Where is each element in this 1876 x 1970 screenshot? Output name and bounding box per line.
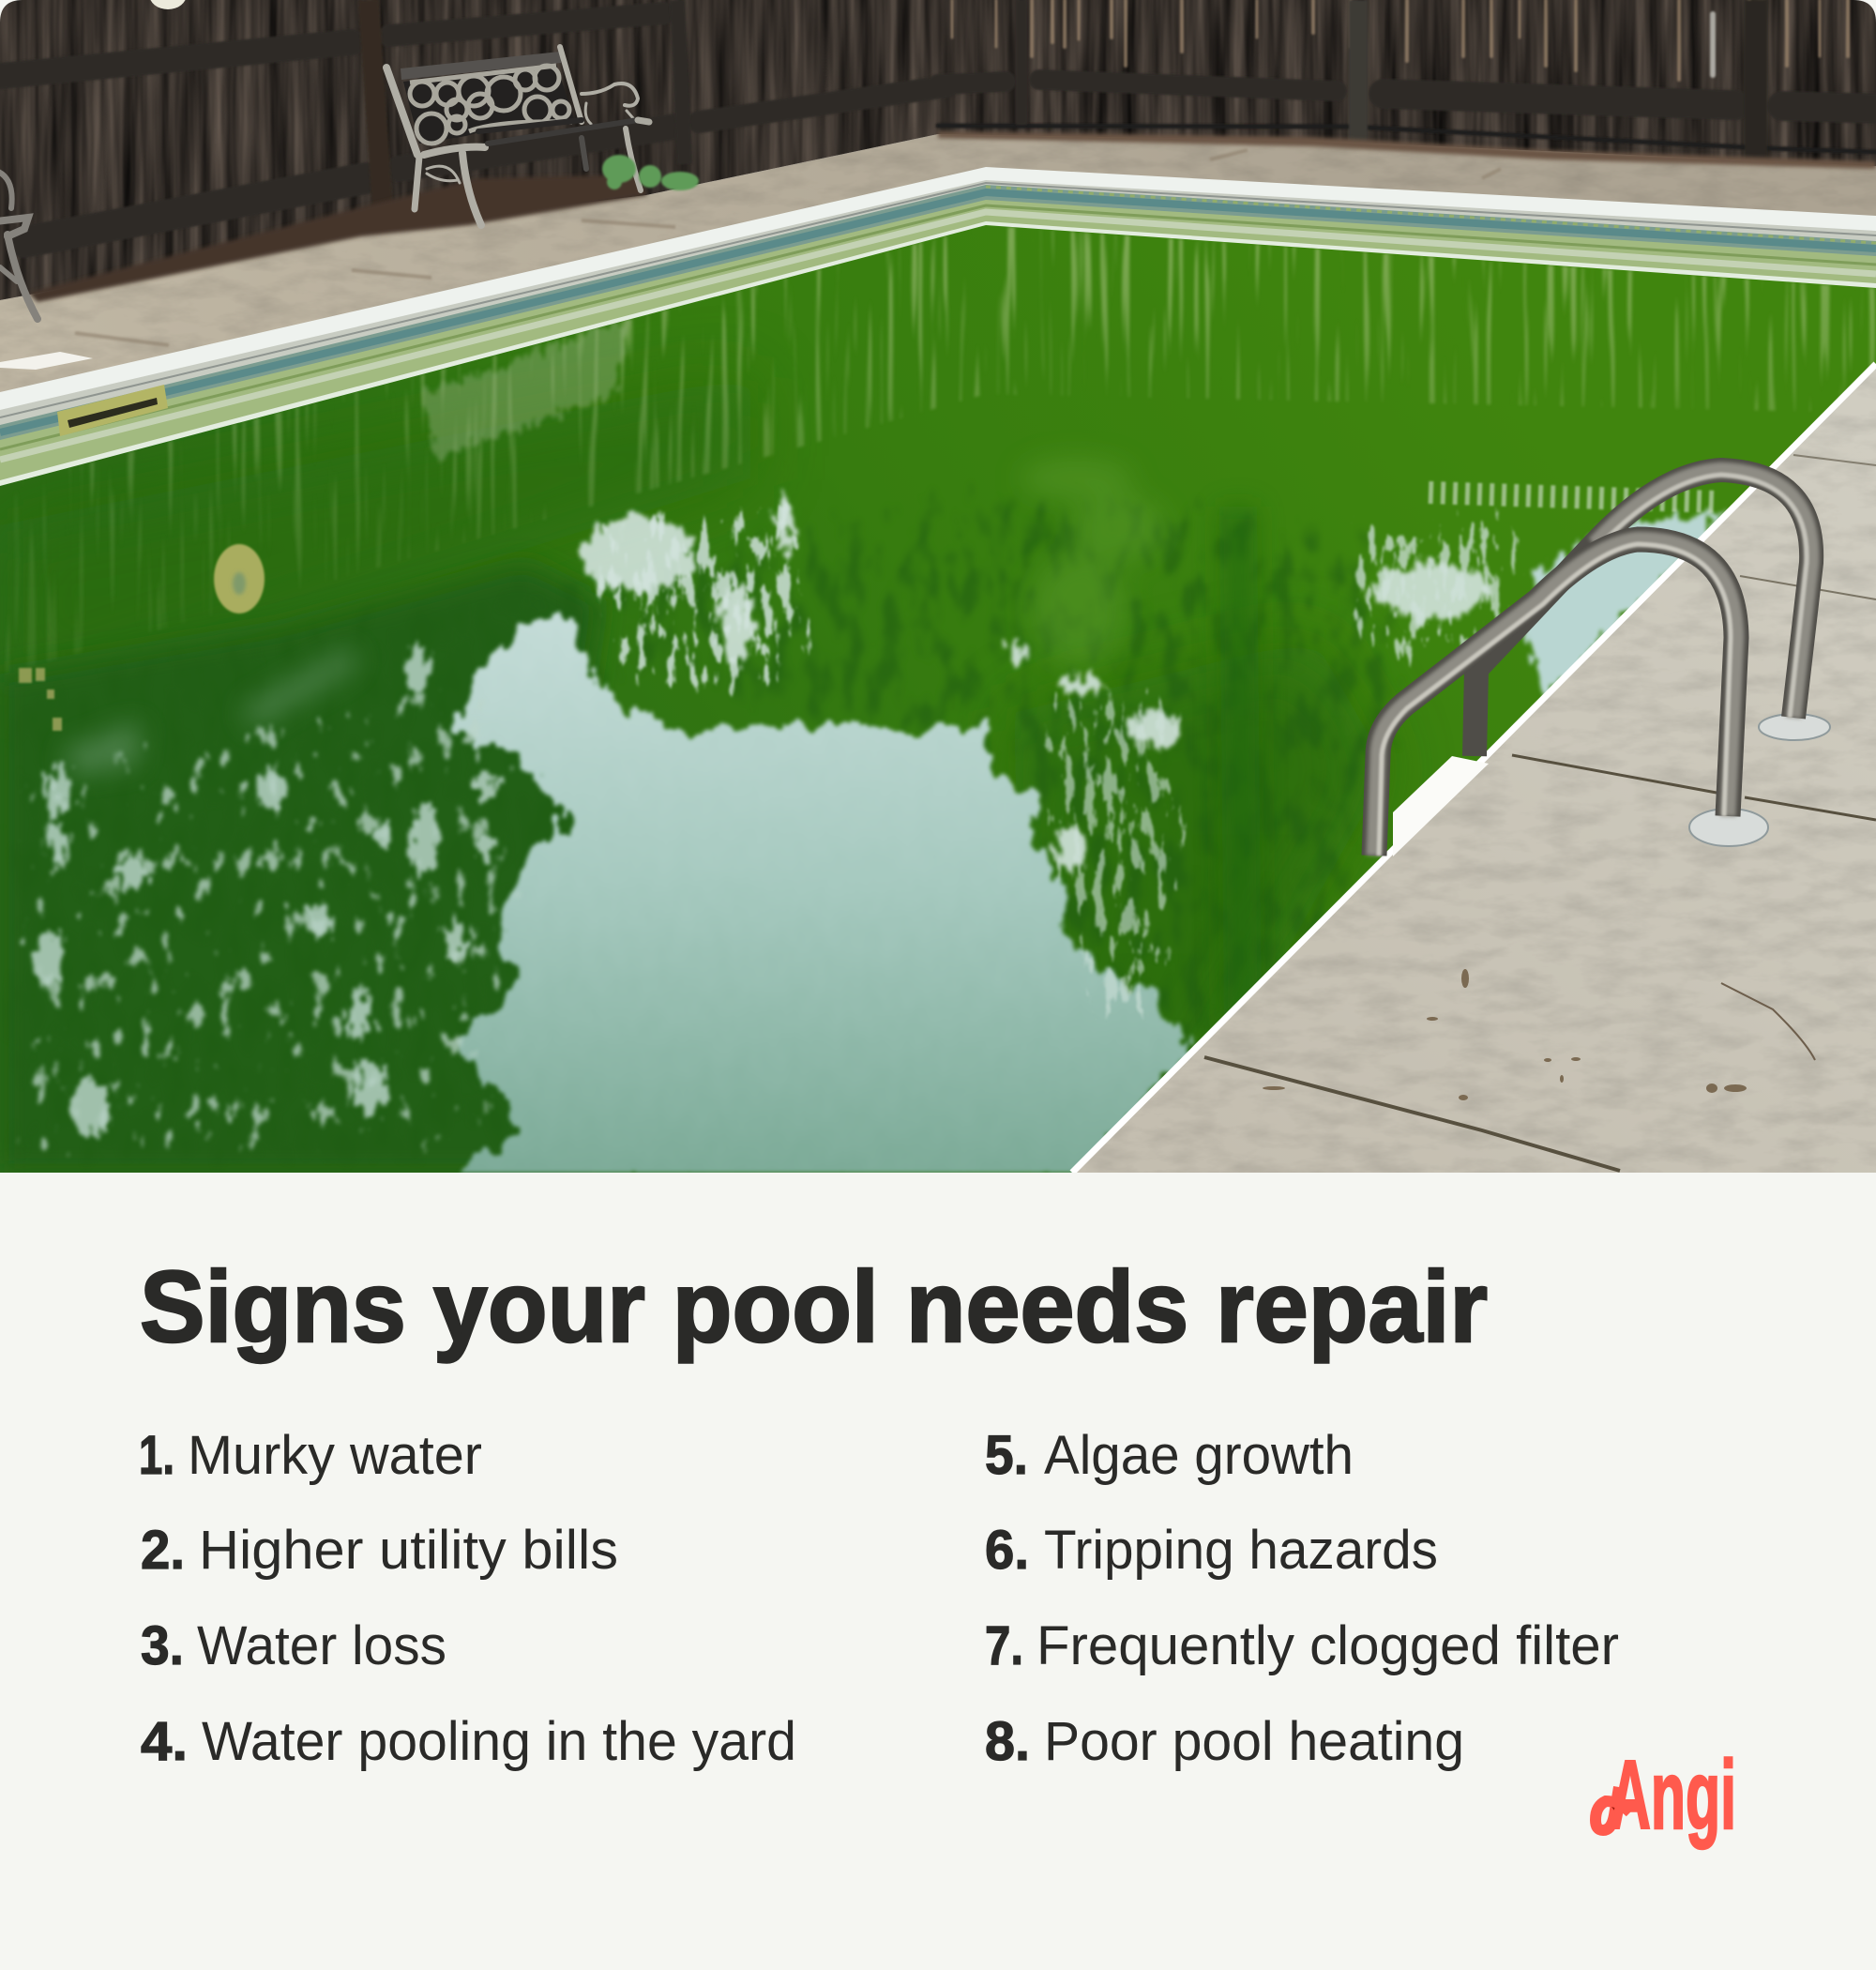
skimmer [57, 385, 168, 436]
bench [386, 47, 649, 225]
item 8: 8. [985, 1711, 1030, 1772]
highlights in left tree [33, 644, 495, 1132]
sky reflection (teal) [455, 610, 1195, 1182]
paper on deck [0, 352, 93, 370]
bright centre patches [582, 492, 1487, 870]
second bench at left edge [0, 171, 38, 319]
small tile glints at left [19, 668, 62, 731]
light green patches [1021, 458, 1166, 666]
front rail [1374, 539, 1768, 856]
item 7: 7. [985, 1615, 1023, 1676]
item 5: 5. [985, 1425, 1028, 1486]
bright pale area near ladder [1524, 511, 1726, 699]
water base [0, 188, 1876, 1220]
title: Signs your pool needs repair [140, 1250, 1488, 1363]
deck debris [1263, 969, 1815, 1100]
item 7: Frequently clogged filter [1036, 1615, 1619, 1676]
item 1: 1. [139, 1425, 174, 1486]
logo: Angi [1596, 1741, 1736, 1850]
item 6: Tripping hazards [1044, 1520, 1438, 1581]
back rail [1475, 470, 1830, 756]
deck stains [75, 150, 1501, 345]
deck cracks [1204, 455, 1876, 1171]
item 2: Higher utility bills [199, 1520, 618, 1581]
list: left column [139, 1425, 796, 1772]
white ladder step [1393, 756, 1489, 856]
white object at top edge [149, 0, 187, 9]
white pool edge line [1072, 364, 1876, 1173]
water [0, 188, 1876, 1220]
item 2: 2. [141, 1520, 185, 1581]
bench reflection [422, 319, 628, 460]
fence reflection streaks [0, 225, 1876, 675]
darker upper left [0, 375, 750, 713]
item 4: Water pooling in the yard [202, 1711, 796, 1772]
logo: Angi: Angi [1610, 1741, 1736, 1850]
sky through left tree [0, 638, 544, 1173]
item 3: Water loss [197, 1615, 446, 1676]
item 3: 3. [141, 1615, 184, 1676]
item 8: Poor pool heating [1044, 1711, 1464, 1772]
fence [0, 0, 1876, 300]
deck in front [1072, 364, 1876, 1173]
list: right column [985, 1425, 1619, 1772]
pool coping and tile bands [0, 167, 1876, 582]
item 4: 4. [141, 1711, 188, 1772]
leaf debris along fence [28, 131, 1876, 302]
darker right tree [1013, 638, 1388, 1173]
item 5: Algae growth [1044, 1425, 1354, 1486]
sky showing through right tree [1032, 675, 1201, 1032]
ladder [1374, 470, 1830, 856]
dark mottling over trees [0, 469, 1407, 1173]
pool light reflection [214, 544, 265, 614]
deck behind the pool [0, 134, 1876, 392]
tree reflection: left mass [0, 563, 600, 1173]
item 6: 6. [985, 1520, 1029, 1581]
sky showing through centre tree [575, 469, 825, 713]
dark trunk reflection [1238, 507, 1243, 1032]
plant by bench [602, 155, 699, 190]
item 1: Murky water [188, 1425, 482, 1486]
fence reflection comb near ladder [1429, 492, 1717, 502]
reflected deck edge band [66, 647, 356, 774]
photo: green pool [0, 0, 1876, 1220]
